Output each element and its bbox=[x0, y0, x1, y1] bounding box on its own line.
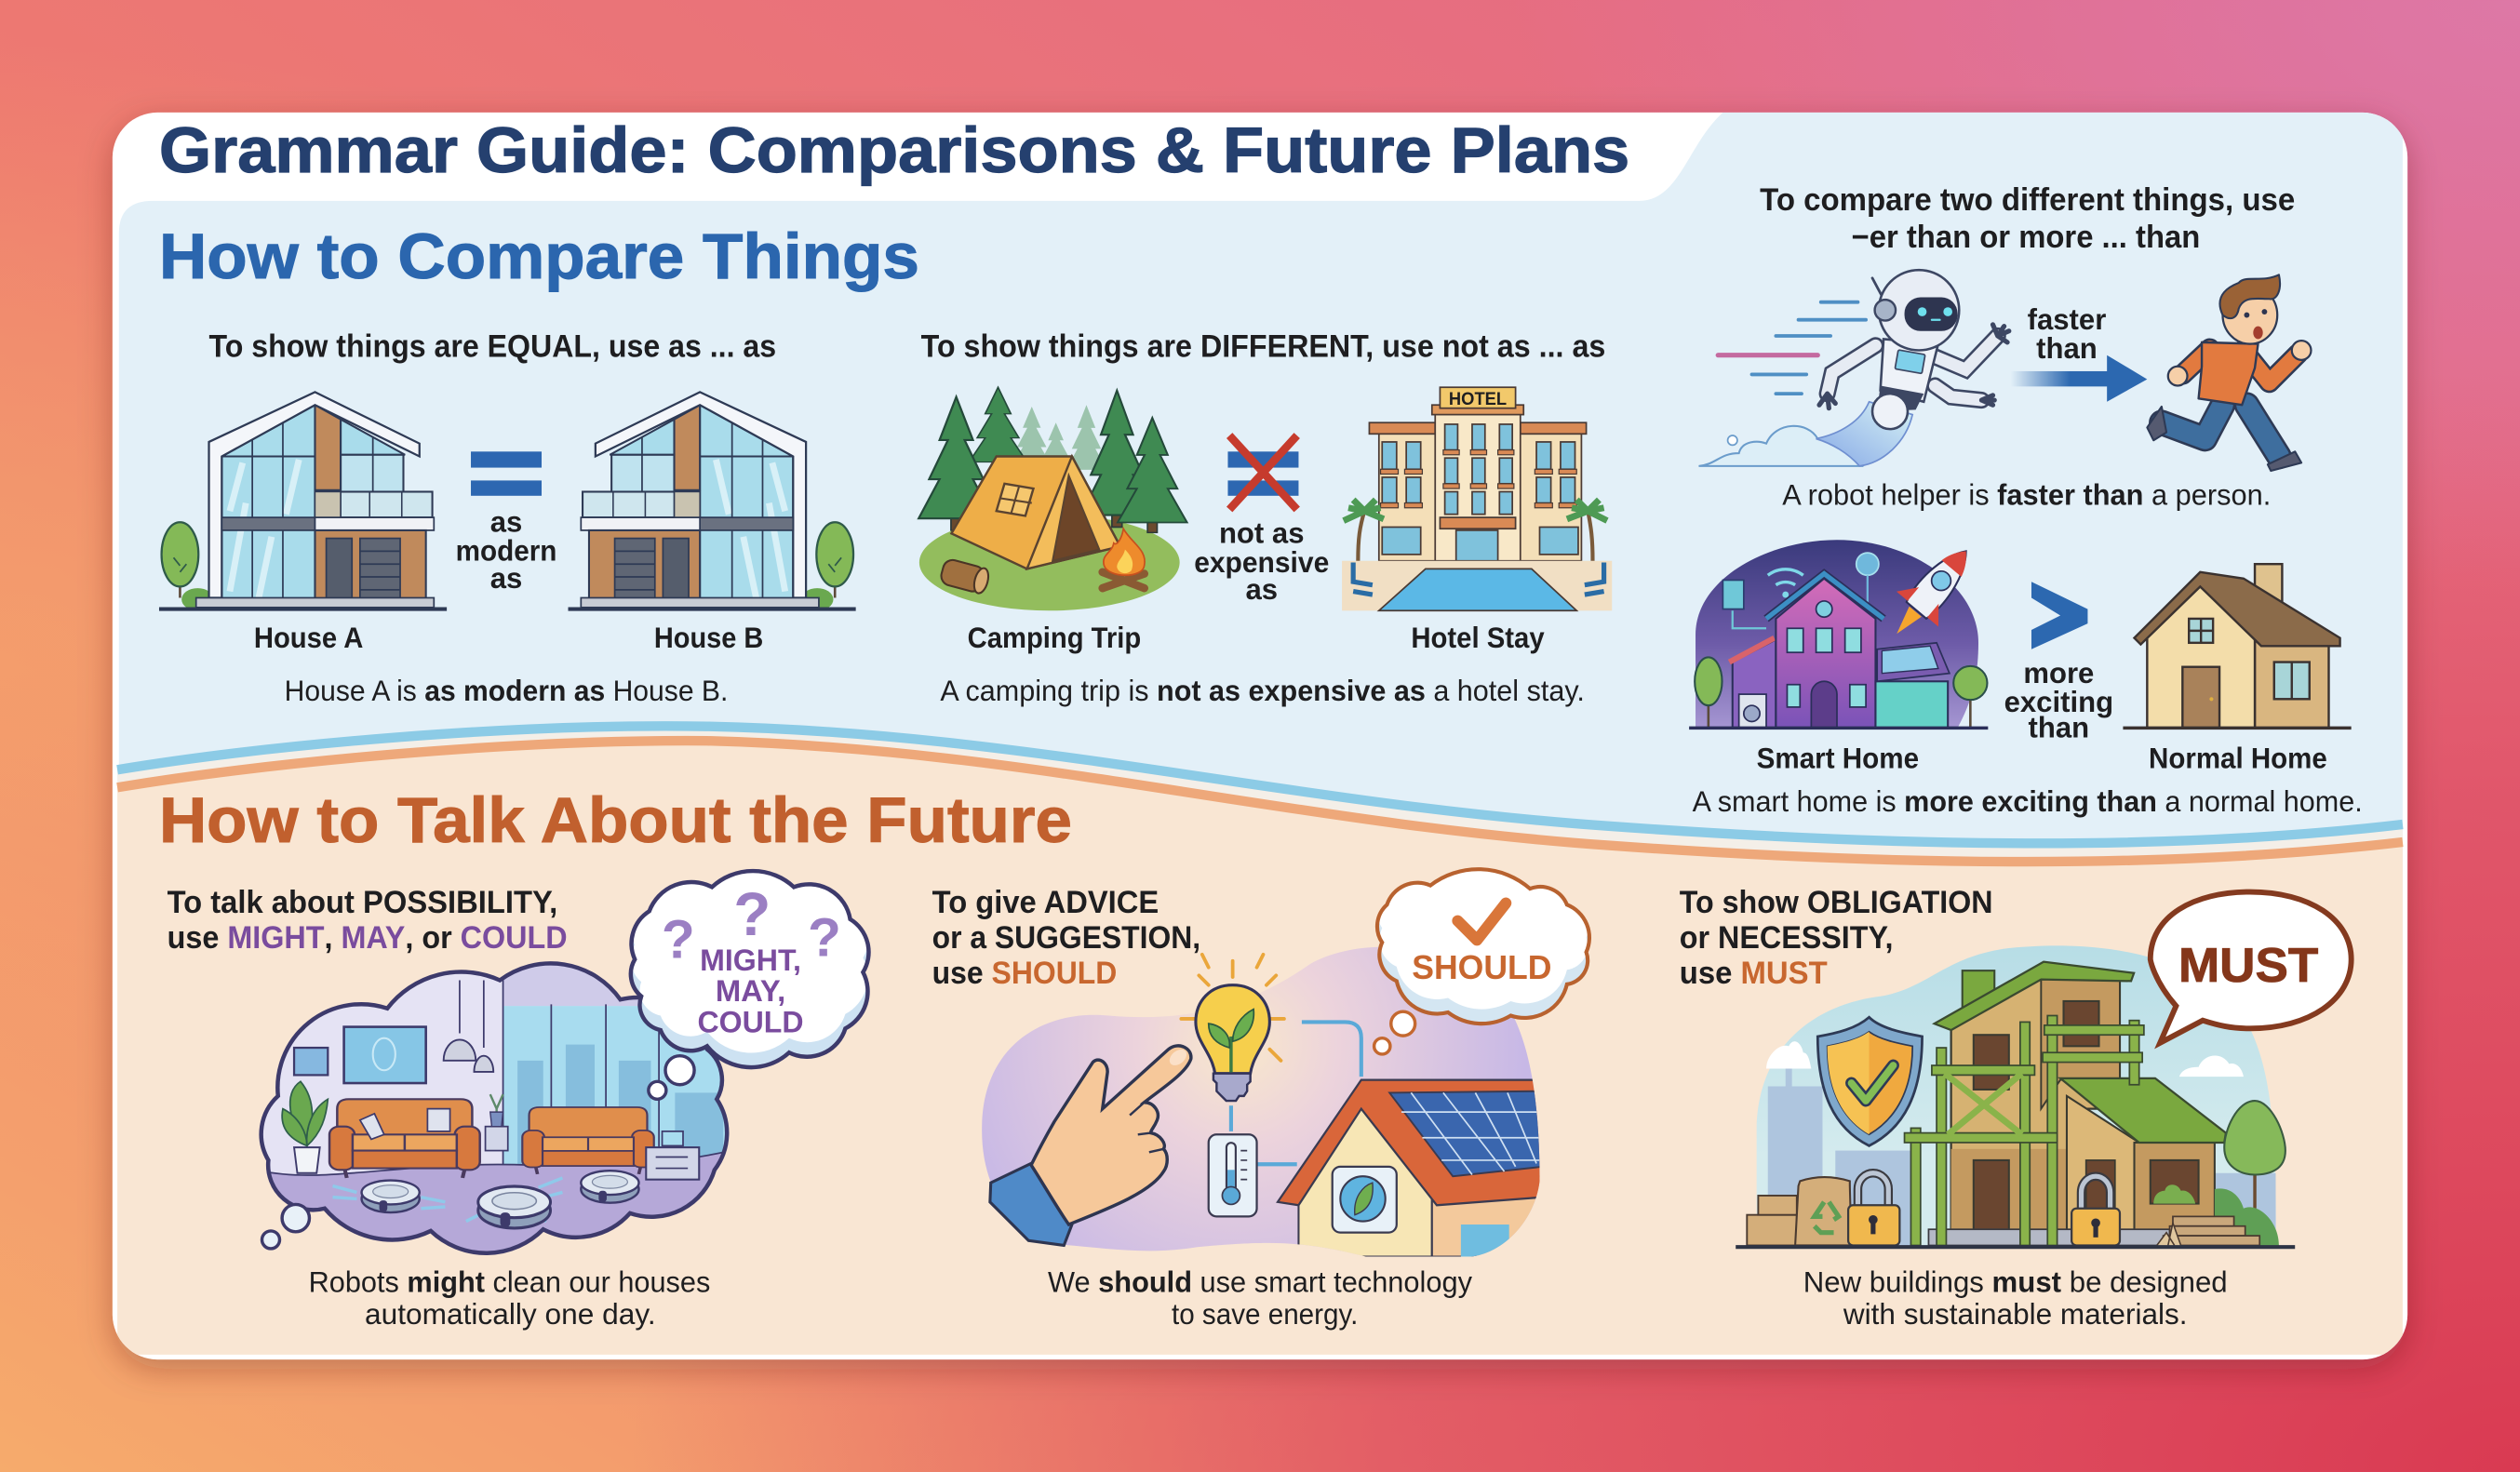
label: camping trip: Camping Trip bbox=[968, 622, 1141, 654]
text: obligation rule: To show OBLIGATION bbox=[1680, 885, 1993, 920]
text: not as expensive as: not as bbox=[1219, 517, 1304, 550]
text: obligation rule: use MUST bbox=[1680, 956, 1828, 991]
illustration: smart energy scene bbox=[982, 947, 1545, 1257]
label: house A: House A bbox=[254, 622, 363, 654]
example: energy sentence bbox=[1048, 1266, 1472, 1331]
example: house sentence: House A is as modern as House B. bbox=[285, 675, 728, 707]
text: more exciting than bbox=[2004, 657, 2113, 744]
panel: how to compare things background bbox=[119, 113, 2403, 838]
text: more exciting than: exciting bbox=[2004, 686, 2113, 718]
title: Grammar Guide: Comparisons & Future Plans bbox=[159, 114, 1629, 186]
text: equal rule: To show things are EQUAL, use as ... as bbox=[209, 328, 776, 364]
text: not as expensive as: as bbox=[1245, 573, 1278, 606]
example: smart home sentence: A smart home is more exciting than a normal home. bbox=[1693, 785, 2363, 818]
speech cloud: might may could: ? bbox=[808, 908, 841, 969]
example: camping sentence: A camping trip is not as expensive as a hotel stay. bbox=[940, 675, 1585, 707]
speech cloud: might may could: ? bbox=[662, 909, 695, 970]
text: obligation rule bbox=[1680, 885, 1993, 991]
text: advice rule: To give ADVICE bbox=[932, 885, 1159, 920]
illustration: running person bbox=[2147, 274, 2311, 471]
illustration: smart home bbox=[1689, 534, 1988, 728]
speech cloud: might may could: MIGHT, bbox=[700, 943, 801, 977]
illustration: thought cloud with robot vacuums bbox=[257, 948, 731, 1269]
speech cloud: might may could: ? bbox=[733, 880, 771, 948]
speech bubble: must bbox=[2151, 892, 2352, 1043]
text: more exciting than: than bbox=[2029, 712, 2089, 744]
wavy blue divider bbox=[117, 726, 2403, 843]
icon: equals sign bbox=[471, 451, 542, 496]
text: not as expensive as bbox=[1194, 517, 1329, 606]
example: energy sentence: to save energy. bbox=[1172, 1298, 1358, 1331]
text: as modern as bbox=[456, 506, 556, 595]
text: faster than: faster bbox=[2028, 303, 2106, 336]
illustration: sustainable building bbox=[1736, 945, 2295, 1247]
text: different rule: To show things are DIFFERENT, use not as ... as bbox=[921, 328, 1605, 364]
example: buildings sentence: New buildings must be designed bbox=[1803, 1266, 2228, 1299]
example: robots sentence bbox=[309, 1266, 710, 1331]
text: advice rule: or a SUGGESTION, bbox=[932, 920, 1200, 956]
text: advice rule bbox=[932, 885, 1200, 991]
illustration: flying robot bbox=[1698, 270, 2009, 466]
speech bubble: must: MUST bbox=[2178, 938, 2319, 992]
text: as modern as: as bbox=[490, 506, 522, 539]
heading: how to talk about the future: How to Talk About the Future bbox=[159, 783, 1072, 856]
wavy orange divider bbox=[117, 741, 2403, 862]
illustration: hotel with pool bbox=[1342, 387, 1612, 610]
text: faster than: than bbox=[2036, 332, 2098, 365]
text: not as expensive as: expensive bbox=[1194, 546, 1329, 579]
speech cloud: might may could: MAY, bbox=[716, 973, 785, 1008]
white card bbox=[113, 113, 2407, 1359]
example: robots sentence: Robots might clean our houses bbox=[309, 1266, 710, 1299]
label: normal home: Normal Home bbox=[2149, 743, 2327, 775]
text: more exciting than: more bbox=[2023, 657, 2094, 689]
text: comparative rule: To compare two different things, use bbox=[1760, 182, 2295, 218]
icon: greater-than chevron bbox=[2031, 582, 2087, 649]
text: hotel sign: HOTEL bbox=[1449, 390, 1507, 409]
text: possibility rule bbox=[168, 885, 568, 956]
speech cloud: should: SHOULD bbox=[1412, 948, 1551, 986]
text: as modern as: modern bbox=[456, 535, 556, 568]
example: buildings sentence bbox=[1803, 1266, 2228, 1331]
icon: crossed-out equals sign bbox=[1227, 435, 1298, 509]
example: energy sentence: We should use smart technology bbox=[1048, 1266, 1472, 1299]
label: hotel stay: Hotel Stay bbox=[1411, 622, 1545, 654]
speech cloud: should bbox=[1374, 855, 1589, 1054]
speech cloud: might may could: COULD bbox=[698, 1005, 804, 1039]
text: possibility rule: To talk about POSSIBILITY, bbox=[168, 885, 557, 920]
text: possibility rule: use MIGHT, MAY, or COULD bbox=[168, 920, 568, 956]
label: house B: House B bbox=[654, 622, 763, 654]
text: as modern as: as bbox=[490, 562, 522, 595]
example: buildings sentence: with sustainable materials. bbox=[1843, 1298, 2188, 1331]
example: robots sentence: automatically one day. bbox=[365, 1298, 656, 1331]
illustration: house B bbox=[569, 392, 856, 610]
illustration: normal home bbox=[2123, 564, 2352, 728]
text: obligation rule: or NECESSITY, bbox=[1680, 920, 1893, 956]
text: comparative rule: −er than or more ... than bbox=[1852, 220, 2200, 255]
text: faster than bbox=[2028, 303, 2106, 365]
panel: how to talk about the future background bbox=[117, 726, 2403, 1355]
label: smart home: Smart Home bbox=[1757, 743, 1919, 775]
text: comparative rule bbox=[1760, 182, 2295, 255]
text: advice rule: use SHOULD bbox=[932, 956, 1117, 991]
arrow: faster than bbox=[2011, 355, 2147, 402]
heading: how to compare things: How to Compare Things bbox=[159, 220, 919, 292]
example: robot sentence: A robot helper is faster than a person. bbox=[1782, 478, 2271, 511]
illustration: house A bbox=[159, 392, 447, 610]
speech cloud: might may could bbox=[631, 857, 868, 1099]
illustration: camping trip bbox=[918, 387, 1187, 610]
